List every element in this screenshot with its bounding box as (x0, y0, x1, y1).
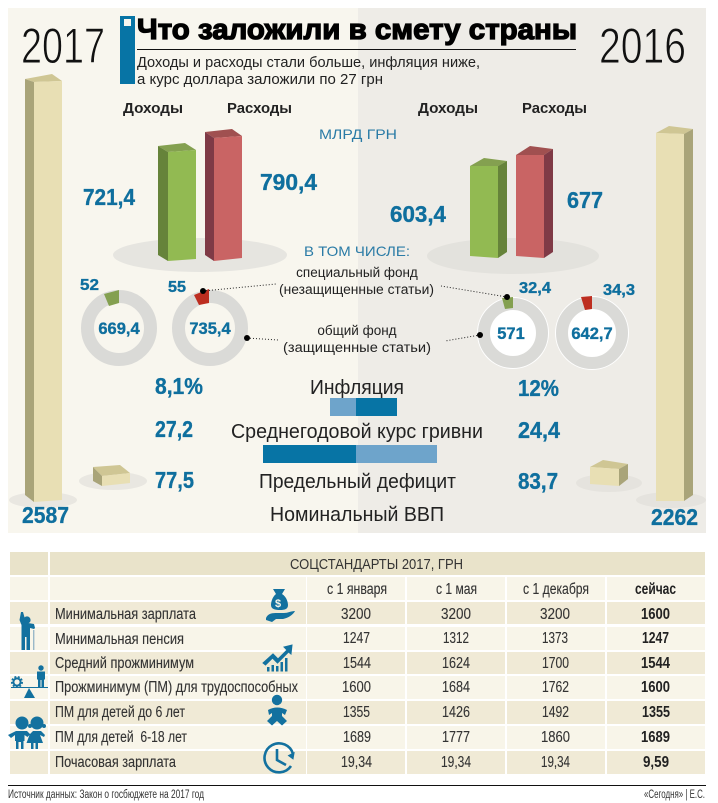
headings: income and expenses (123, 101, 587, 117)
icon: money bag and hand (266, 589, 295, 622)
row: children 6-18: ПМ для детей 6-18 лет (55, 729, 187, 746)
indicator: inflation: 8,1% (155, 373, 203, 399)
indicator: deficit (155, 467, 558, 494)
special fund values: 34,3 (603, 282, 635, 299)
icon: pensioner (20, 612, 35, 650)
row: subsistence minimum for workers: 1600 (641, 679, 670, 696)
icon: money bag and hand: $ (275, 598, 281, 610)
row: average subsistence minimum: 1700 (542, 655, 569, 672)
unit label: МЛРД ГРН (319, 126, 397, 142)
indicator: exchange rate: Среднегодовой курс гривни (231, 421, 483, 443)
subtitle: Доходы и расходы стали больше, инфляция ниже, (137, 55, 480, 71)
row: average subsistence minimum: 1624 (442, 655, 470, 672)
row: minimum pension: 1247 (343, 630, 370, 647)
icon: scales with gear and worker (11, 665, 48, 698)
table column headers: сейчас (635, 581, 676, 598)
icon: clock (265, 743, 297, 772)
row: hourly wage (55, 754, 669, 771)
donut: 2017 income: 669,4 (98, 320, 140, 338)
label: special fund (279, 265, 434, 297)
row: hourly wage: 19,34 (441, 754, 471, 771)
special fund values: 32,4 (519, 280, 551, 297)
donut: 2016 income (477, 297, 549, 369)
title: Что заложили в смету страны (137, 14, 577, 46)
row: children under 6: 1355 (642, 704, 670, 721)
column: GDP 2017 (9, 74, 77, 508)
label: general fund: общий фонд (317, 323, 397, 338)
indicator: inflation: 12% (518, 375, 559, 401)
icon: growth chart (263, 645, 292, 672)
indicator: exchange rate (155, 416, 560, 463)
label: general fund (283, 323, 431, 355)
leader lines (200, 284, 510, 341)
indicator: nominal GDP: Номинальный ВВП (270, 504, 444, 526)
table column headers: с 1 декабря (523, 581, 589, 598)
row: minimum wage: 3200 (341, 606, 371, 623)
donut: 2017 expenses (178, 289, 242, 360)
table column headers: с 1 мая (436, 581, 477, 598)
table: social standards (10, 552, 705, 774)
row: children 6-18: 1860 (541, 729, 570, 746)
label: general fund: (защищенные статьи) (283, 340, 431, 355)
row: average subsistence minimum (55, 655, 670, 672)
row: minimum wage: Минимальная зарплата (55, 606, 196, 623)
title marker (120, 16, 135, 84)
column: GDP 2016 (636, 126, 706, 508)
headings: income and expenses: Расходы (227, 101, 292, 117)
row: children under 6: 1492 (542, 704, 569, 721)
row: children under 6: ПМ для детей до 6 лет (55, 704, 185, 721)
table heading: СОЦСТАНДАРТЫ 2017, ГРН (290, 556, 463, 573)
donut: 2016 expenses: 642,7 (571, 325, 613, 343)
bar chart: 2017 (113, 129, 287, 272)
indicator: deficit: 83,7 (518, 468, 558, 494)
indicator: deficit 2016 cube (576, 460, 642, 492)
row: minimum wage: 3200 (540, 606, 570, 623)
label: special fund: специальный фонд (296, 265, 418, 280)
row: minimum pension: 1247 (642, 630, 669, 647)
special fund values (80, 277, 635, 299)
year 2017: 2017 (21, 18, 105, 74)
indicator: deficit 2017 cube (79, 465, 147, 490)
values: income and expenses: 603,4 (390, 201, 446, 227)
indicator: exchange rate: 27,2 (155, 416, 193, 442)
headings: income and expenses: Расходы (522, 101, 587, 117)
subtitle (137, 55, 480, 88)
values: income and expenses (83, 169, 603, 227)
table column headers (327, 581, 676, 598)
values: income and expenses: 790,4 (260, 169, 317, 195)
row: children under 6: 1426 (442, 704, 470, 721)
year 2016: 2016 (599, 18, 686, 74)
title rule (137, 49, 576, 50)
indicator: nominal GDP: 2587 (22, 502, 69, 528)
table heading (10, 552, 705, 575)
subheading: including: В ТОМ ЧИСЛЕ: (304, 243, 410, 259)
headings: income and expenses: Доходы (123, 101, 183, 117)
panel: budget background (8, 8, 706, 533)
row: hourly wage: 19,34 (341, 754, 372, 771)
row: children 6-18: 1777 (442, 729, 470, 746)
values: income and expenses: 721,4 (83, 184, 135, 210)
row: minimum pension: Минимальная пенсия (55, 631, 184, 648)
values: income and expenses: 677 (567, 187, 603, 213)
bar chart: 2016 (427, 146, 599, 274)
icon: children (8, 716, 46, 749)
row: subsistence minimum for workers: 1762 (542, 679, 569, 696)
row: hourly wage: Почасовая зарплата (55, 754, 176, 771)
indicator: inflation: Инфляция (310, 377, 404, 399)
donut: 2017 expenses: 735,4 (189, 320, 231, 338)
row: children 6-18 (55, 729, 670, 746)
row: children under 6 (55, 704, 670, 721)
donut: 2016 expenses (555, 296, 629, 370)
row: subsistence minimum for workers: 1600 (342, 679, 371, 696)
indicator: nominal GDP (22, 502, 698, 530)
row: minimum wage (55, 606, 670, 623)
indicator: nominal GDP: 2262 (651, 504, 698, 530)
row: average subsistence minimum: Средний прожминимум (55, 655, 194, 672)
donut: 2017 income (88, 290, 150, 360)
headings: income and expenses: Доходы (418, 101, 478, 117)
row: hourly wage: 9,59 (643, 754, 669, 771)
row: children 6-18: 1689 (343, 729, 371, 746)
indicator: inflation (155, 373, 559, 416)
indicator: deficit: 77,5 (155, 467, 194, 493)
subtitle: а курс доллара заложили по 27 грн (137, 72, 383, 88)
source note: Источник данных: Закон о госбюджете на 2017 год (8, 789, 204, 801)
row: subsistence minimum for workers (55, 679, 670, 696)
row: average subsistence minimum: 1544 (641, 655, 670, 672)
indicator: deficit: Предельный дефицит (259, 471, 456, 493)
row: subsistence minimum for workers: Прожминимум (ПМ) для трудоспособных (55, 679, 298, 696)
donut: 2016 income: 571 (497, 325, 525, 343)
table column headers: с 1 января (327, 581, 387, 598)
table row backgrounds (10, 577, 705, 774)
row: hourly wage: 19,34 (541, 754, 570, 771)
indicator: exchange rate: 24,4 (518, 417, 560, 443)
row: children under 6: 1355 (343, 704, 370, 721)
row: minimum pension: 1312 (443, 630, 469, 647)
icon: baby (267, 695, 287, 726)
row: average subsistence minimum: 1544 (343, 655, 371, 672)
footer rule (8, 785, 706, 786)
row: children 6-18: 1689 (641, 729, 670, 746)
row: subsistence minimum for workers: 1684 (442, 679, 470, 696)
row: minimum wage: 3200 (441, 606, 471, 623)
special fund values: 52 (80, 277, 99, 294)
special fund values: 55 (168, 279, 186, 296)
row: minimum pension (55, 630, 669, 648)
label: special fund: (незащищенные статьи) (279, 282, 434, 297)
row: minimum wage: 1600 (641, 606, 670, 623)
row: minimum pension: 1373 (542, 630, 568, 647)
